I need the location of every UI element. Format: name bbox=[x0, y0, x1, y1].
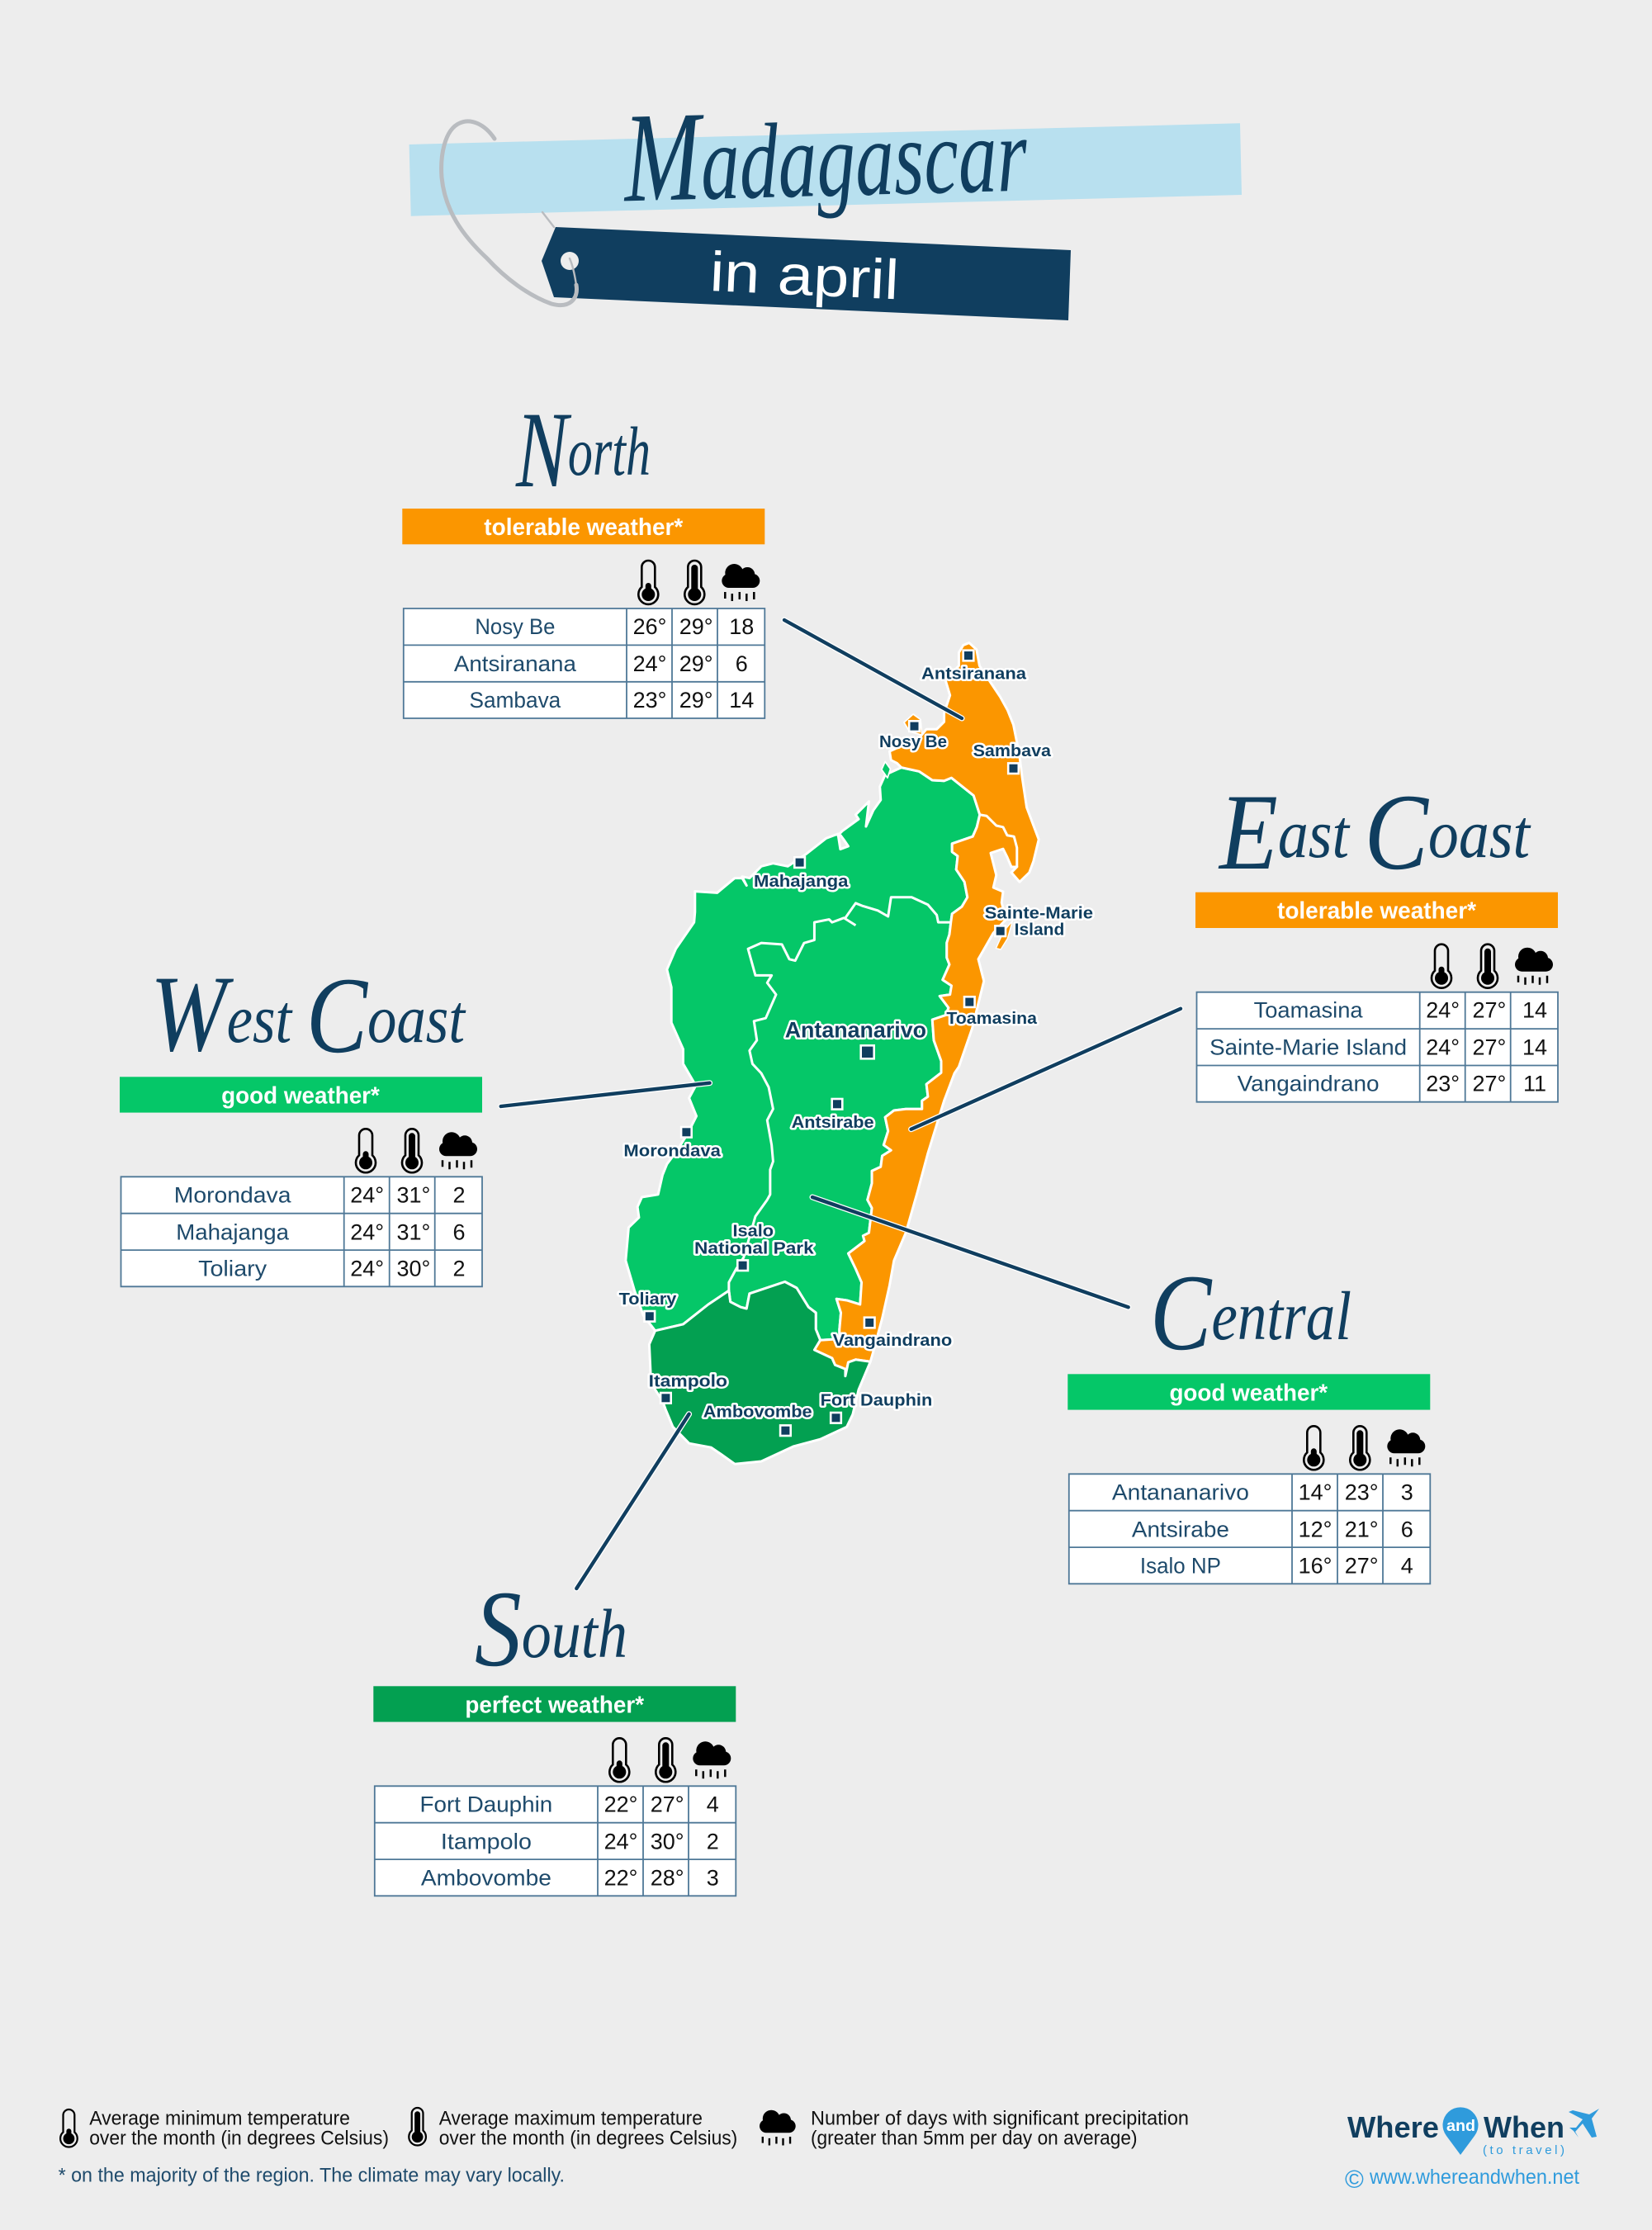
tag hole bbox=[561, 252, 579, 270]
logo word: When: When bbox=[1484, 2110, 1564, 2144]
icon: minimum temperature bbox=[1432, 945, 1451, 988]
heading: East Coast: oast bbox=[1428, 796, 1531, 873]
climate table: 6 bbox=[1401, 1517, 1413, 1541]
climate table: Fort Dauphin bbox=[420, 1792, 552, 1816]
logo word: Where: Where bbox=[1347, 2110, 1439, 2144]
tag string bbox=[442, 121, 576, 305]
legend text: minimum temperature: Average minimum temperature bbox=[89, 2107, 350, 2129]
weather bar and table bbox=[402, 509, 764, 718]
weather rating bar: good weather* bbox=[1169, 1380, 1328, 1406]
legend text: maximum temperature: Average maximum temperature bbox=[439, 2107, 703, 2129]
weather rating bar: good weather* bbox=[221, 1082, 381, 1109]
climate table: 27° bbox=[651, 1792, 684, 1816]
climate table bbox=[121, 1177, 482, 1286]
label Antananarivo: Antananarivo bbox=[785, 1017, 926, 1042]
climate table: 22° bbox=[604, 1792, 637, 1816]
climate table: 24° bbox=[350, 1256, 384, 1281]
marker Toliary bbox=[644, 1311, 655, 1322]
logo: Where and When bbox=[1345, 2107, 1599, 2194]
leader line: West Coast bbox=[501, 1083, 710, 1106]
climate table: 27° bbox=[1345, 1553, 1379, 1578]
climate table: 28° bbox=[651, 1865, 684, 1890]
label Antsiranana: Antsiranana bbox=[921, 664, 1027, 684]
climate table: 30° bbox=[651, 1829, 684, 1854]
climate table: 14 bbox=[1522, 1035, 1547, 1060]
icon: plane bbox=[1569, 2109, 1599, 2138]
heading: West Coast: oast bbox=[367, 981, 466, 1058]
marker Fort Dauphin bbox=[831, 1413, 841, 1423]
legend text: precipitation: Number of days with significant precipitation bbox=[811, 2107, 1189, 2129]
icon: maximum temperature bbox=[656, 1738, 675, 1782]
logo tagline: (to travel) bbox=[1483, 2143, 1564, 2157]
island: Sainte-Marie bbox=[996, 921, 1012, 949]
climate table: 11 bbox=[1523, 1072, 1546, 1096]
climate table bbox=[1069, 1474, 1430, 1584]
climate table: Morondava bbox=[174, 1182, 291, 1207]
label Itampolo: Itampolo bbox=[649, 1371, 727, 1390]
weather rating bar bbox=[120, 1077, 482, 1113]
label Nosy Be: Nosy Be bbox=[879, 732, 947, 751]
heading: West Coast: est bbox=[227, 981, 306, 1058]
climate table: Vangaindrano bbox=[1238, 1072, 1380, 1096]
climate table: 2 bbox=[707, 1829, 719, 1854]
label Sainte-Marie Island: Island bbox=[1015, 920, 1064, 939]
logo word: and: and bbox=[1446, 2118, 1475, 2135]
climate table: Toliary bbox=[198, 1256, 267, 1281]
climate table: 24° bbox=[1426, 1035, 1460, 1060]
title banner bbox=[409, 77, 1242, 320]
icon: rain cloud bbox=[693, 1741, 731, 1778]
title: Madagascar: Madagascar bbox=[621, 77, 1029, 229]
climate table: 27° bbox=[1472, 1072, 1506, 1096]
climate table: 2 bbox=[452, 1182, 466, 1207]
climate table: 3 bbox=[707, 1865, 719, 1890]
islands: north-west bbox=[882, 761, 891, 778]
marker Toamasina bbox=[964, 997, 975, 1007]
climate table: Toamasina bbox=[1254, 998, 1363, 1023]
navy luggage tag bbox=[542, 227, 1071, 320]
climate table: 18 bbox=[729, 614, 754, 639]
climate table: 24° bbox=[633, 651, 666, 676]
heading: West Coast: C bbox=[306, 954, 369, 1076]
climate table: Isalo NP bbox=[1140, 1553, 1221, 1578]
climate table: 31° bbox=[396, 1219, 430, 1244]
heading: South: S bbox=[475, 1568, 522, 1689]
climate table: Sainte-Marie Island bbox=[1209, 1035, 1407, 1060]
region: west coast and central (good weather) bbox=[626, 768, 980, 1340]
climate table: 23° bbox=[633, 688, 666, 713]
marker Isalo National Park bbox=[737, 1260, 748, 1271]
region: north and east coast (tolerable weather) bbox=[814, 643, 1039, 1376]
leader line: North bbox=[784, 620, 962, 718]
marker Mahajanga bbox=[794, 857, 805, 868]
climate table: 31° bbox=[396, 1182, 430, 1207]
weather rating bar: tolerable weather* bbox=[1277, 898, 1477, 925]
climate table bbox=[375, 1786, 736, 1896]
heading: Central: C bbox=[1150, 1252, 1213, 1373]
icon: minimum temperature bbox=[1304, 1426, 1323, 1470]
climate table: Nosy Be bbox=[475, 614, 555, 639]
marker Antsiranana bbox=[963, 651, 973, 660]
label Sambava: Sambava bbox=[973, 741, 1052, 760]
panel: North bbox=[402, 389, 764, 718]
label Morondava: Morondava bbox=[623, 1142, 722, 1161]
weather rating bar bbox=[373, 1686, 736, 1722]
marker Sainte-Marie Island bbox=[995, 926, 1006, 936]
marker Sambava bbox=[1008, 763, 1019, 774]
climate table: 29° bbox=[679, 688, 713, 713]
climate table: 21° bbox=[1345, 1517, 1379, 1541]
icon: minimum temperature bbox=[638, 561, 658, 604]
climate table: 14 bbox=[729, 688, 754, 713]
icon: minimum temperature bbox=[609, 1738, 629, 1782]
climate table: 12° bbox=[1299, 1517, 1332, 1541]
climate table bbox=[404, 608, 764, 718]
marker Antsirabe bbox=[832, 1099, 842, 1110]
website url: www.whereandwhen.net bbox=[1369, 2166, 1579, 2189]
heading: South: outh bbox=[522, 1596, 627, 1673]
weather bar and table bbox=[1195, 892, 1558, 1102]
panel: Central bbox=[1067, 1252, 1430, 1584]
city labels and markers bbox=[619, 651, 1093, 1436]
label Sainte-Marie Island: Sainte-Marie bbox=[985, 903, 1093, 922]
icon: maximum temperature bbox=[1478, 945, 1498, 988]
climate table: 30° bbox=[396, 1256, 430, 1281]
legend text: maximum temperature: over the month (in degrees Celsius) bbox=[439, 2127, 737, 2149]
weather rating bar bbox=[402, 509, 764, 544]
heading: North: N bbox=[515, 389, 572, 510]
weather rating bar bbox=[1195, 892, 1558, 928]
climate table: 29° bbox=[679, 614, 713, 639]
marker Ambovombe bbox=[780, 1425, 791, 1436]
leader line: East Coast bbox=[911, 1009, 1181, 1129]
climate table: Antananarivo bbox=[1112, 1480, 1249, 1504]
climate table: 27° bbox=[1472, 998, 1506, 1023]
icon: minimum temperature bbox=[356, 1129, 376, 1172]
marker Nosy Be bbox=[909, 721, 920, 731]
leader line: Central bbox=[812, 1197, 1129, 1307]
legend icon: maximum temperature bbox=[409, 2108, 426, 2146]
legend text: minimum temperature: over the month (in degrees Celsius) bbox=[89, 2127, 389, 2149]
icon: map pin bbox=[1443, 2107, 1478, 2155]
climate table: 4 bbox=[707, 1792, 719, 1816]
climate table: 6 bbox=[452, 1219, 466, 1244]
subtitle: in april: in april bbox=[708, 240, 901, 311]
panel: South bbox=[373, 1568, 736, 1896]
climate table: 29° bbox=[679, 651, 713, 676]
legend bbox=[59, 2107, 1189, 2187]
island: Nosy Be bbox=[904, 714, 922, 735]
weather bar and table bbox=[120, 1077, 482, 1286]
climate table: 24° bbox=[350, 1182, 384, 1207]
label Ambovombe: Ambovombe bbox=[703, 1403, 812, 1422]
climate table: 24° bbox=[350, 1219, 384, 1244]
label Antsirabe: Antsirabe bbox=[792, 1113, 874, 1132]
climate table: Mahajanga bbox=[176, 1219, 289, 1244]
climate table: 4 bbox=[1401, 1553, 1413, 1578]
climate table: 27° bbox=[1472, 1035, 1506, 1060]
icon: rain cloud bbox=[722, 564, 760, 601]
icon: rain cloud bbox=[1387, 1429, 1425, 1466]
climate table: 2 bbox=[452, 1256, 466, 1281]
weather bar and table bbox=[373, 1686, 736, 1896]
climate table: Antsirabe bbox=[1132, 1517, 1229, 1541]
footnote: * on the majority of the region. The climate may vary locally. bbox=[59, 2165, 565, 2187]
climate table: 23° bbox=[1345, 1480, 1379, 1504]
heading: East Coast: ast bbox=[1278, 796, 1365, 873]
label Vangaindrano: Vangaindrano bbox=[833, 1331, 952, 1350]
climate table: 22° bbox=[604, 1865, 637, 1890]
weather rating bar: tolerable weather* bbox=[484, 514, 684, 541]
legend icon: rain cloud bbox=[760, 2110, 796, 2145]
legend icon: minimum temperature bbox=[60, 2109, 78, 2147]
heading: Central: entral bbox=[1211, 1278, 1351, 1355]
marker Morondava bbox=[681, 1127, 692, 1138]
label Isalo National Park: National Park bbox=[694, 1238, 814, 1257]
climate table: 14 bbox=[1522, 998, 1547, 1023]
marker Vangaindrano bbox=[864, 1318, 875, 1328]
weather rating bar: perfect weather* bbox=[465, 1692, 645, 1718]
climate table: 24° bbox=[1426, 998, 1460, 1023]
weather bar and table bbox=[1067, 1374, 1430, 1584]
label Fort Dauphin: Fort Dauphin bbox=[821, 1390, 932, 1409]
map of Madagascar bbox=[626, 643, 1039, 1464]
climate table: Antsiranana bbox=[454, 651, 576, 676]
marker Itampolo bbox=[660, 1393, 671, 1404]
climate table: 14° bbox=[1299, 1480, 1332, 1504]
climate table: 26° bbox=[633, 614, 666, 639]
region: south (perfect weather) bbox=[649, 1281, 870, 1464]
panel: East Coast bbox=[1195, 771, 1558, 1102]
climate table: Sambava bbox=[470, 688, 561, 713]
panel: West Coast bbox=[120, 953, 482, 1286]
heading: West Coast: W bbox=[150, 953, 234, 1074]
climate table: 24° bbox=[604, 1829, 637, 1854]
label Toamasina: Toamasina bbox=[946, 1009, 1038, 1028]
icon: maximum temperature bbox=[1350, 1426, 1370, 1470]
climate table: 16° bbox=[1299, 1553, 1332, 1578]
copyright mark: © bbox=[1345, 2165, 1364, 2194]
leader line: South bbox=[576, 1414, 689, 1588]
marker Antananarivo bbox=[861, 1045, 874, 1058]
climate table: Itampolo bbox=[441, 1829, 532, 1854]
climate table: 6 bbox=[736, 651, 748, 676]
heading: East Coast: C bbox=[1365, 771, 1430, 892]
heading: North: orth bbox=[568, 414, 651, 490]
climate table: Ambovombe bbox=[421, 1865, 551, 1890]
label Toliary: Toliary bbox=[619, 1290, 677, 1309]
icon: maximum temperature bbox=[402, 1129, 422, 1172]
label Mahajanga: Mahajanga bbox=[754, 872, 849, 891]
weather rating bar bbox=[1067, 1374, 1430, 1410]
climate table: 3 bbox=[1401, 1480, 1413, 1504]
icon: rain cloud bbox=[1515, 948, 1553, 985]
climate table: 23° bbox=[1426, 1072, 1460, 1096]
heading: East Coast: E bbox=[1218, 771, 1278, 892]
label Isalo National Park: Isalo bbox=[733, 1221, 774, 1240]
legend text: precipitation: (greater than 5mm per day on average) bbox=[811, 2127, 1138, 2149]
light blue title band bbox=[409, 123, 1242, 216]
icon: rain cloud bbox=[439, 1132, 477, 1169]
climate table bbox=[1197, 992, 1558, 1102]
icon: maximum temperature bbox=[684, 561, 704, 604]
